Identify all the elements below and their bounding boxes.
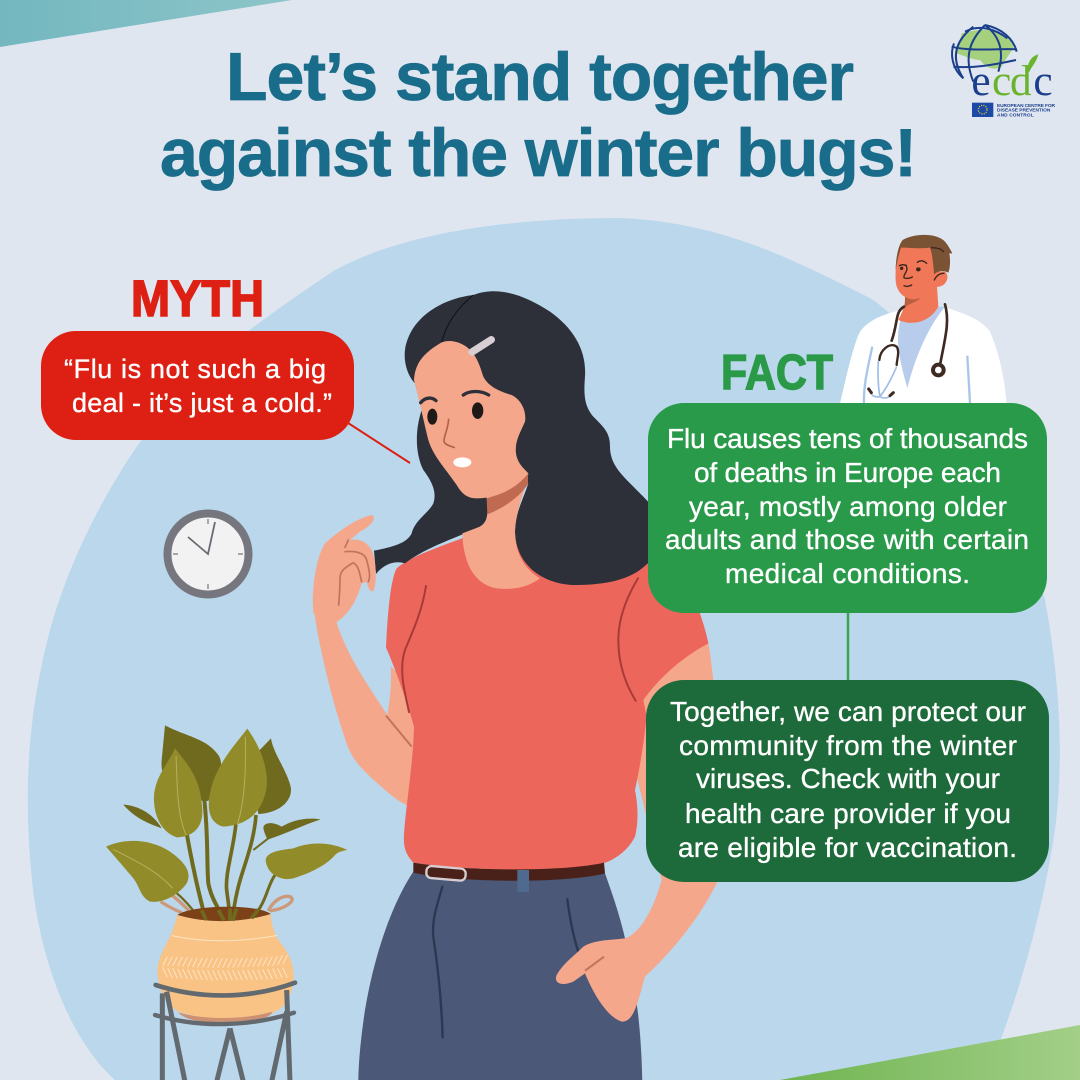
logo stem [1028, 55, 1037, 72]
pot opening [177, 907, 271, 921]
logo caption: DISEASE PREVENTION [997, 108, 1051, 114]
mouth [453, 457, 471, 467]
myth text: deal - it’s just a cold.” [72, 388, 332, 418]
fact heading: FACT [721, 346, 833, 400]
hair parting [442, 295, 473, 342]
facial features [421, 340, 491, 467]
myth text [64, 354, 332, 418]
doctor hair [896, 235, 952, 274]
doctor features [899, 248, 944, 286]
face [414, 341, 528, 498]
eyes [427, 409, 437, 425]
raised hand [313, 515, 376, 623]
neck shadow [487, 473, 528, 514]
shirt [386, 537, 708, 869]
fact text: adults and those with certain [665, 524, 1029, 555]
fact text: medical conditions. [725, 558, 970, 589]
leaf veins [113, 737, 246, 888]
fact text: Flu causes tens of thousands [667, 423, 1028, 454]
back leaves [123, 725, 321, 839]
myth callout [41, 331, 354, 440]
doctor head [896, 243, 947, 299]
logo EU flag [972, 103, 993, 117]
background blob [28, 218, 1060, 1080]
stems [175, 800, 275, 921]
clock body [168, 514, 248, 594]
logo globe lines [952, 25, 1017, 82]
clock ticks [173, 519, 243, 589]
action text: Together, we can protect our [670, 696, 1026, 727]
pot base [178, 1012, 273, 1023]
belt [413, 863, 605, 892]
front leaves [106, 729, 347, 902]
finger lines [339, 540, 370, 605]
logo caption: EUROPEAN CENTRE FOR [997, 103, 1055, 109]
wall clock [168, 514, 248, 594]
fact callout [648, 403, 1047, 613]
chest piece [933, 365, 944, 375]
shirt creases [402, 578, 638, 712]
clock hands [188, 522, 215, 554]
plant stand [155, 983, 295, 1080]
pot handles [161, 895, 292, 913]
logo wordmark: d [1010, 57, 1032, 105]
hair [374, 291, 658, 585]
myth pointer line [345, 421, 410, 463]
left arm [313, 603, 415, 806]
doctor neck [898, 282, 938, 323]
fact text: of deaths in Europe each [694, 457, 1001, 488]
action text [670, 696, 1026, 863]
pot [157, 914, 294, 1019]
title: Let’s stand together [226, 39, 854, 115]
logo flag stars [978, 105, 987, 114]
neck [462, 473, 540, 589]
myth text: “Flu is not such a big [64, 354, 326, 384]
undershirt [898, 307, 945, 388]
nose [444, 419, 455, 448]
title: against the winter bugs! [160, 115, 917, 191]
corner accent: green [780, 1025, 1080, 1080]
pot pattern [163, 935, 287, 980]
logo wordmark: c [1033, 57, 1053, 105]
myth heading: MYTH [131, 270, 264, 327]
right arm [556, 627, 720, 1022]
action callout [646, 680, 1049, 882]
arm crease [386, 716, 412, 747]
stethoscope earpiece tubes [869, 361, 897, 398]
action text: are eligible for vaccination. [678, 832, 1017, 863]
logo caption: AND CONTROL [997, 113, 1034, 119]
action text: community from the winter [679, 730, 1017, 761]
corner accent: teal [0, 0, 292, 47]
potted plant [106, 725, 347, 1080]
action text: viruses. Check with your [696, 763, 1000, 794]
logo: ECDC [952, 25, 1055, 119]
pocket crease [585, 957, 604, 971]
skirt [358, 872, 642, 1080]
neck shadow [905, 292, 925, 307]
action text: health care provider if you [685, 798, 1011, 829]
woman [313, 291, 720, 1080]
stems over opening [202, 908, 258, 921]
eyebrows [421, 391, 489, 403]
doctor [840, 235, 1007, 405]
fact text [665, 423, 1029, 589]
logo map [957, 30, 1013, 69]
logo wordmark: c [992, 57, 1011, 105]
logo caption [997, 103, 1055, 119]
logo wordmark: e [971, 57, 991, 105]
title [160, 39, 917, 191]
connector [847, 612, 849, 681]
coat seams [864, 347, 970, 403]
hair clip [472, 340, 491, 352]
stethoscope tubing [879, 345, 898, 365]
lab coat [840, 307, 1007, 405]
logo wordmark [971, 57, 1053, 105]
fact text: year, mostly among older [689, 491, 1007, 522]
